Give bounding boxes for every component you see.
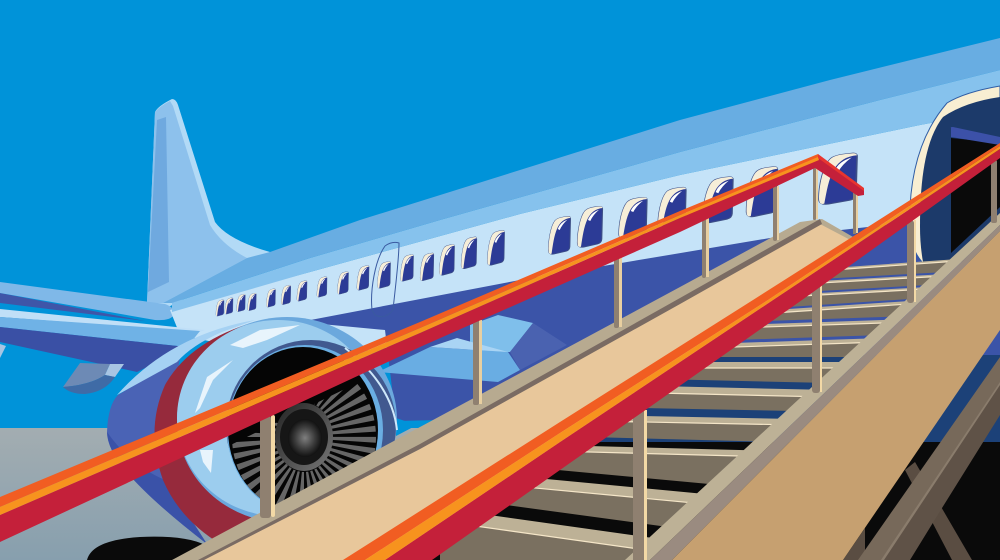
post I [812, 285, 822, 393]
railing posts [260, 160, 997, 560]
nacelle lower shade [107, 432, 207, 544]
ground shadow [87, 537, 215, 560]
post B [473, 320, 482, 405]
main wing [0, 309, 205, 372]
horizontal stabilizer [0, 282, 174, 321]
ground [0, 428, 1000, 560]
inlet opening [228, 347, 378, 513]
wing fairing [510, 323, 567, 370]
engine [107, 317, 397, 545]
aircraft door [910, 86, 1000, 262]
post A [260, 415, 275, 518]
walkway deck [203, 222, 858, 560]
fuselage mid band [172, 70, 1000, 312]
sky [0, 0, 1000, 428]
near handrail [0, 154, 864, 542]
lower tan deck [672, 231, 1000, 560]
wing upper lobe [470, 315, 533, 352]
wing pale streak [430, 338, 508, 352]
far handrail [343, 143, 1000, 560]
nacelle body [107, 358, 207, 544]
fuselage top dark band [163, 38, 1000, 303]
fuselage belly [300, 222, 1000, 421]
nacelle pale strip [117, 320, 255, 395]
cowl lip outer [177, 317, 397, 523]
post C [614, 255, 622, 328]
lower fuselage navy [430, 355, 1000, 442]
post D [702, 218, 709, 278]
walkway side edge [172, 219, 860, 560]
windows [216, 153, 857, 316]
fuselage pale window band [170, 110, 1000, 360]
scaffold legs [843, 357, 1000, 560]
red cowl band [154, 321, 300, 545]
inlet mid ring [227, 345, 383, 515]
flap fairing [63, 363, 124, 394]
post K [991, 160, 997, 223]
fan hub [275, 403, 333, 471]
stairs [440, 256, 1000, 560]
post G [853, 192, 858, 234]
post H [633, 410, 647, 560]
fuselage [163, 38, 1000, 436]
post E [773, 186, 779, 241]
lower black shadow [430, 442, 1000, 560]
sky notch [396, 418, 417, 436]
inlet dark ring [226, 340, 396, 512]
walkway edge shadow [198, 219, 822, 560]
stair stringer [625, 213, 1000, 560]
passenger door outline [372, 242, 399, 317]
fan blades [254, 380, 354, 494]
wing root band [378, 347, 520, 382]
cowl lip [177, 320, 379, 516]
post J [907, 220, 916, 303]
lip highlights [195, 325, 300, 473]
tail fin [147, 99, 270, 310]
inlet pale rim [345, 348, 397, 430]
post F [813, 168, 818, 220]
